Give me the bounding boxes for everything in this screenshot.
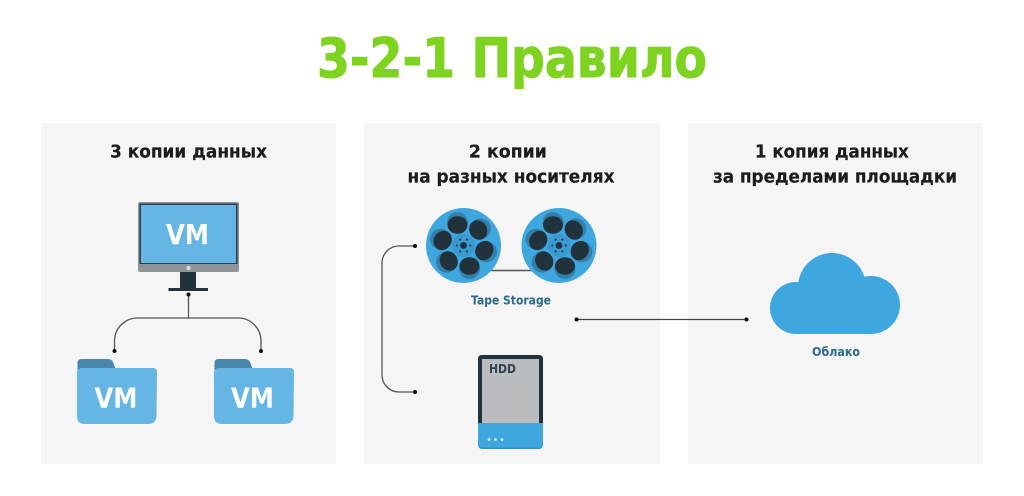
icon: monitor [138, 202, 239, 291]
bracket connector [382, 244, 417, 394]
panel: 1 copy offsite [688, 123, 983, 464]
icon: folder left: VM [94, 382, 138, 414]
label: tape storage: Tape Storage [471, 292, 551, 308]
panel: 3 copies of data [41, 123, 336, 464]
heading: 2 copies: 2 копии [469, 142, 547, 162]
icon: HDD [478, 355, 543, 449]
label: cloud: Облако [812, 344, 860, 359]
tape link [490, 270, 534, 272]
heading: 2 copies: на разных носителях [408, 166, 615, 188]
icon: HDD: HDD [489, 361, 516, 376]
icon: monitor: VM [166, 219, 209, 251]
icon: folder left [77, 359, 157, 424]
arrow: tape storage to cloud [574, 318, 748, 322]
connector dots [112, 292, 263, 353]
heading: 1 copy: 1 копия данных [755, 142, 909, 162]
panel: 2 copies on different media [364, 123, 660, 464]
heading: 3 copies: 3 копии данных [110, 142, 267, 162]
title: 3-2-1 Правило [317, 27, 707, 90]
icon: tape reel right [522, 208, 596, 283]
heading: 1 copy: за пределами площадки [713, 166, 957, 188]
icon: tape reel left [426, 208, 501, 283]
icon: folder right [214, 359, 294, 424]
arrow: monitor to folders [114, 295, 261, 351]
icon: cloud [770, 253, 900, 334]
icon: folder right: VM [231, 382, 274, 414]
